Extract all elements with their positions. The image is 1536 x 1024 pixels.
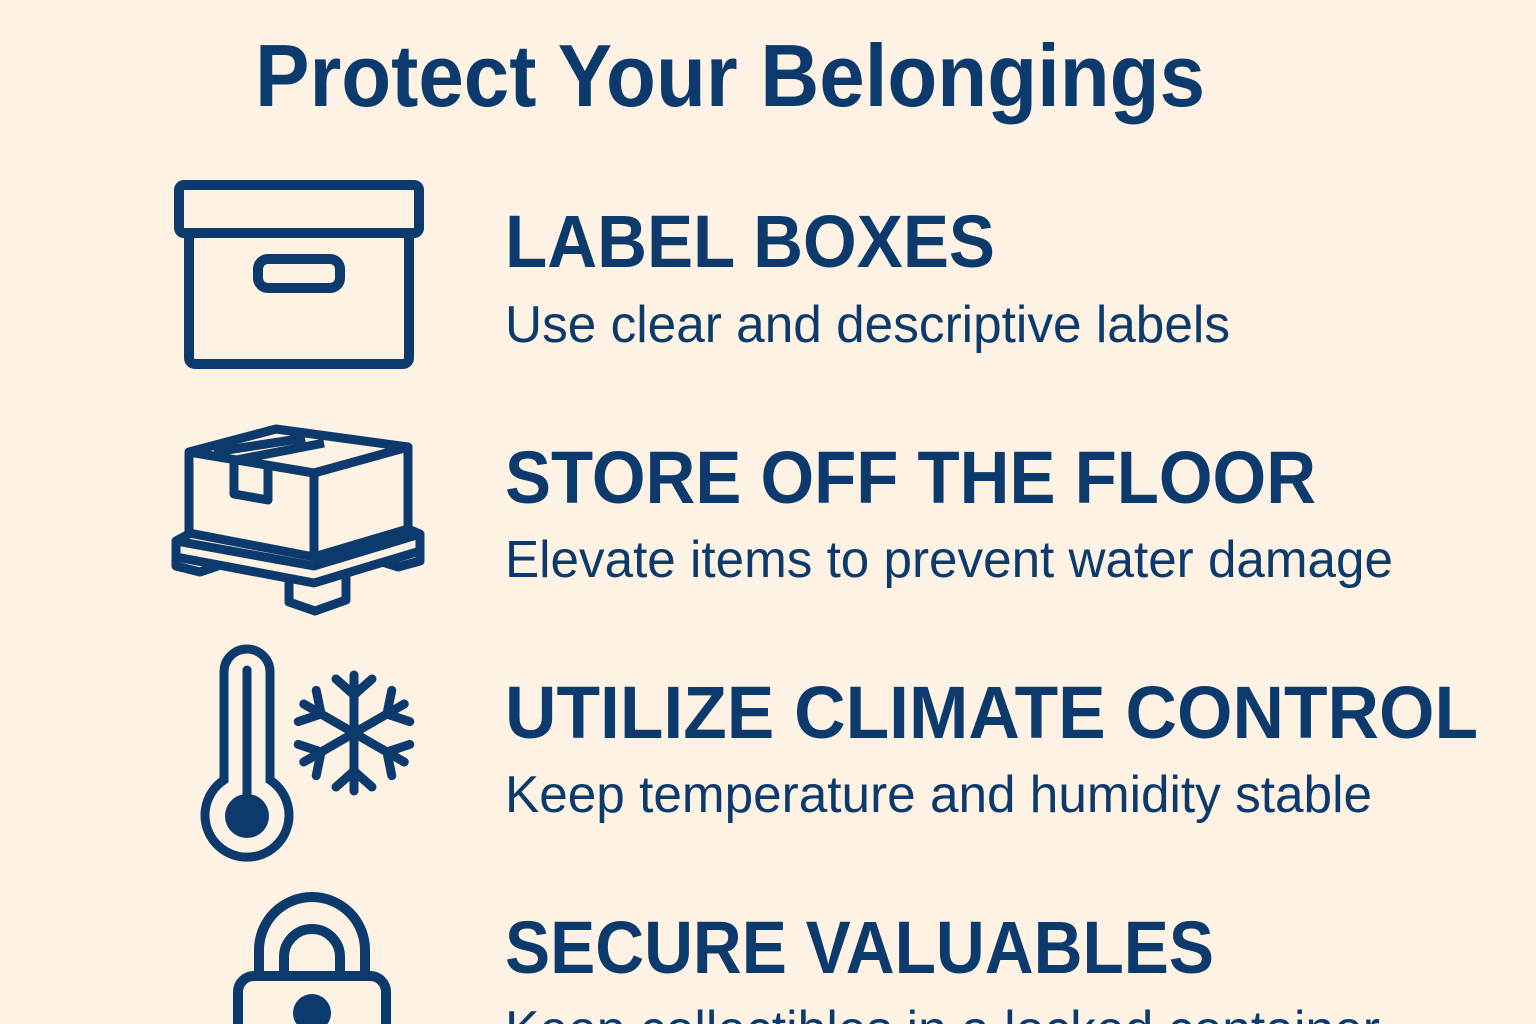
icon: padlock <box>238 897 386 1024</box>
heading: secure valuables: SECURE VALUABLES <box>505 906 1214 989</box>
text: label boxes description: Use clear and descriptive labels <box>505 296 1230 354</box>
heading: climate control: UTILIZE CLIMATE CONTROL <box>505 671 1478 754</box>
icon: thermometer and snowflake <box>205 649 413 857</box>
icon: box on pallet <box>176 429 420 611</box>
heading: label boxes: LABEL BOXES <box>505 200 995 283</box>
title: Protect Your Belongings <box>255 26 1205 125</box>
heading: store off the floor: STORE OFF THE FLOOR <box>505 436 1316 519</box>
text: store off the floor description: Elevate items to prevent water damage <box>505 531 1393 589</box>
text: climate control description: Keep temperature and humidity stable <box>505 766 1372 824</box>
icon: storage box <box>179 185 419 364</box>
